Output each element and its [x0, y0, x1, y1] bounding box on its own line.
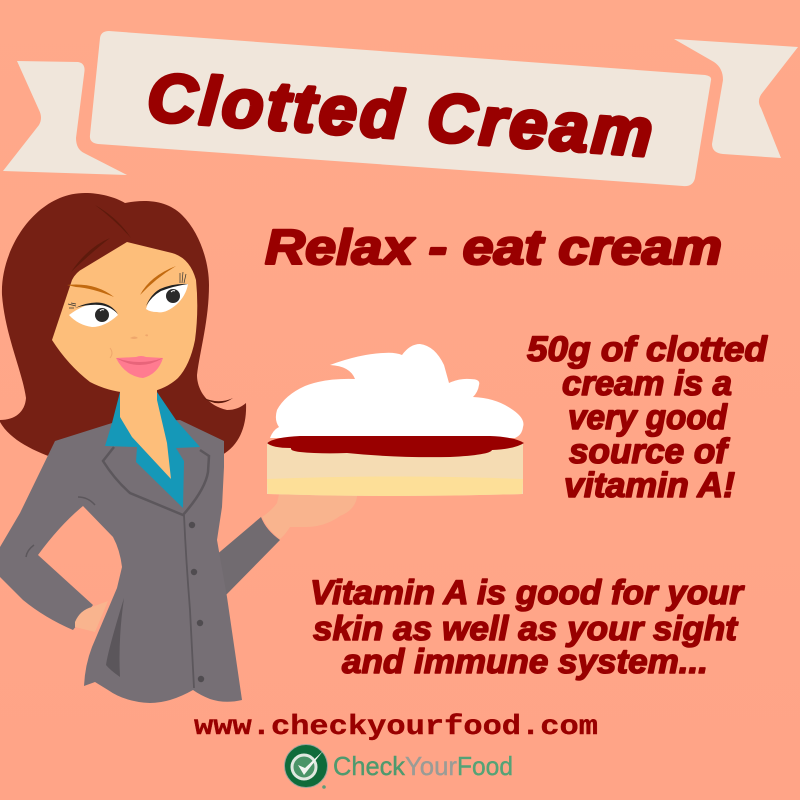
CheckYourFood logo	[284, 744, 513, 789]
shirt collar	[105, 392, 200, 508]
banner ribbon	[90, 31, 711, 186]
face	[52, 242, 197, 393]
woman illustration	[0, 193, 357, 703]
left hand	[75, 601, 108, 632]
right eye	[146, 272, 188, 312]
left eye	[68, 303, 118, 327]
title text: Clotted Cream	[145, 59, 655, 171]
right arm sleeve	[215, 517, 280, 596]
website url: www.checkyourfood.com	[194, 712, 598, 743]
vitamin A source text: cream is a	[562, 364, 732, 403]
banner left tail	[3, 61, 127, 175]
vitamin A benefits text: and immune system...	[342, 643, 708, 681]
jacket	[0, 420, 242, 703]
right hand	[262, 490, 357, 539]
vitamin A source text: very good	[568, 398, 728, 437]
logo wordmark	[333, 751, 513, 781]
jam	[267, 436, 524, 457]
logo wordmark: Check	[333, 751, 406, 781]
scone base	[267, 442, 523, 496]
eyebrows	[67, 266, 176, 297]
scone lower layer	[267, 476, 523, 496]
vitamin A benefits text	[310, 574, 745, 681]
logo icon	[284, 744, 328, 789]
banner right tail	[674, 39, 798, 158]
lips	[116, 356, 163, 378]
vitamin A benefits text: skin as well as your sight	[313, 610, 739, 648]
vitamin A benefits text: Vitamin A is good for your	[310, 574, 745, 612]
clotted cream scone	[267, 344, 524, 496]
subtitle: Relax - eat cream	[265, 221, 722, 275]
title banner	[3, 31, 798, 186]
vitamin A source text	[527, 330, 768, 505]
vitamin A source text: vitamin A!	[564, 466, 735, 505]
cream	[270, 344, 523, 438]
pocket fold	[106, 598, 124, 677]
hair	[0, 193, 246, 460]
logo wordmark: Food	[457, 751, 513, 781]
hair strands	[71, 205, 233, 403]
jacket buttons	[189, 522, 204, 682]
vitamin A source text: 50g of clotted	[527, 330, 768, 369]
neck	[120, 385, 171, 479]
vitamin A source text: source of	[569, 432, 730, 471]
jacket lapel lines	[26, 447, 209, 688]
logo wordmark: Your	[405, 751, 457, 781]
nose and cheek	[130, 334, 148, 339]
